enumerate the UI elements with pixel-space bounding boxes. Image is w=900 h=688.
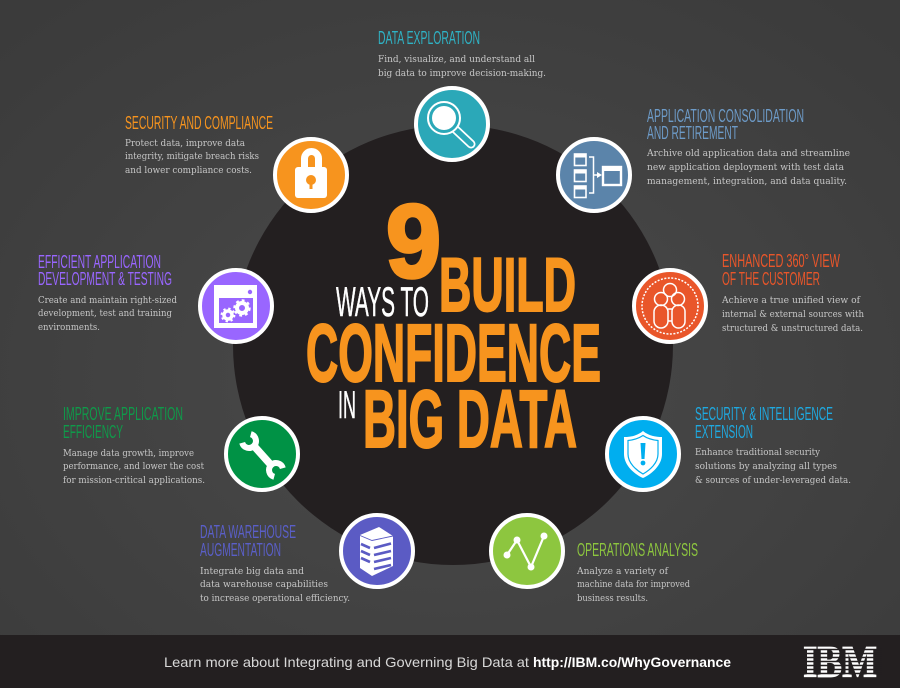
footer call to action (164, 654, 731, 670)
panel: security and compliance: SECURITY AND COMPLIANCE (125, 113, 273, 133)
title (306, 184, 601, 465)
panel: data exploration: big data to improve decision-making. (378, 68, 546, 79)
panel: application consolidation and retirement (646, 106, 850, 187)
title: IN (338, 384, 356, 427)
panel: data warehouse augmentation: DATA WAREHOUSE (200, 522, 296, 542)
panel: data warehouse augmentation: data warehouse capabilities (200, 579, 328, 590)
panel: application consolidation and retirement: AND RETIREMENT (647, 123, 738, 143)
icon: wrench (226, 418, 298, 490)
panel: efficient application development and testing (38, 252, 177, 333)
icon: line chart (491, 515, 563, 587)
panel: application consolidation and retirement: management, integration, and data quality. (647, 176, 847, 187)
panel: data warehouse augmentation: AUGMENTATION (200, 540, 281, 560)
panel: operations analysis: Analyze a variety of (576, 566, 669, 577)
panel: data exploration: DATA EXPLORATION (378, 28, 480, 48)
panel: data warehouse augmentation: to increase operational efficiency. (200, 593, 350, 604)
footer call to action: Learn more about Integrating and Governing Big Data at (164, 654, 529, 670)
panel: efficient application development and testing: DEVELOPMENT & TESTING (38, 269, 172, 289)
panel: operations analysis (576, 540, 698, 604)
panel: security and compliance (125, 113, 273, 176)
panel: enhanced 360 view of the customer: Achieve a true unified view of (721, 295, 861, 306)
panel: data exploration (378, 28, 546, 79)
panel: enhanced 360 view of the customer: internal & external sources with (722, 309, 864, 320)
panel: security and compliance: integrity, mitigate breach risks (125, 151, 259, 162)
panel: operations analysis: business results. (577, 593, 648, 604)
panel: application consolidation and retirement: new application deployment with test data (647, 162, 844, 173)
panel: improve application efficiency (63, 404, 205, 486)
panel: security and intelligence extension: solutions by analyzing all types (695, 461, 837, 472)
panel: improve application efficiency: for mission-critical applications. (63, 475, 205, 486)
footer bar (0, 635, 900, 688)
panel: application consolidation and retirement: Archive old application data and streamline (646, 148, 850, 159)
panel: security and compliance: and lower compliance costs. (125, 165, 252, 176)
panel: security and compliance: Protect data, improve data (125, 138, 245, 149)
footer call to action: http://IBM.co/WhyGovernance (533, 654, 731, 670)
panel: enhanced 360 view of the customer: structured & unstructured data. (722, 323, 863, 334)
panel: improve application efficiency: performance, and lower the cost (63, 461, 204, 472)
title: BIG DATA (363, 374, 577, 465)
icon: data warehouse building (341, 515, 413, 587)
panel: improve application efficiency: Manage data growth, improve (63, 448, 194, 459)
panel: security and intelligence extension: & sources of under-leveraged data. (695, 475, 851, 486)
icon: application window with gears (200, 270, 272, 342)
panel: security and intelligence extension (695, 404, 851, 486)
panel: improve application efficiency: EFFICIENCY (63, 422, 123, 442)
panel: improve application efficiency: IMPROVE APPLICATION (63, 404, 183, 424)
panel: data warehouse augmentation (200, 522, 350, 604)
icon: shield with exclamation mark (607, 418, 679, 490)
title: BUILD (439, 243, 576, 328)
icon: application windows (558, 139, 630, 211)
panel: security and intelligence extension: Enhance traditional security (695, 447, 821, 458)
title: 9 (386, 184, 441, 300)
panel: security and intelligence extension: EXTENSION (695, 422, 753, 442)
icon: magnifying glass (416, 88, 488, 160)
panel: operations analysis: machine data for improved (577, 579, 690, 590)
panel: enhanced 360 view of the customer (721, 251, 864, 334)
icon: customer group in a cycle (634, 270, 706, 342)
central dark circle (233, 125, 673, 565)
title: WAYS TO (336, 278, 429, 325)
panel: operations analysis: OPERATIONS ANALYSIS (577, 540, 698, 560)
panel: efficient application development and testing: Create and maintain right-sized (38, 295, 177, 306)
panel: efficient application development and testing: EFFICIENT APPLICATION (38, 252, 161, 272)
panel: efficient application development and testing: environments. (38, 322, 100, 333)
icon: padlock (275, 139, 347, 211)
panel: data warehouse augmentation: Integrate big data and (200, 566, 304, 577)
panel: efficient application development and testing: development, test and training (38, 308, 172, 319)
IBM logo: IBM (803, 637, 877, 687)
title: CONFIDENCE (306, 308, 601, 399)
panel: enhanced 360 view of the customer: OF THE CUSTOMER (722, 269, 820, 289)
panel: data exploration: Find, visualize, and understand all (378, 54, 535, 65)
